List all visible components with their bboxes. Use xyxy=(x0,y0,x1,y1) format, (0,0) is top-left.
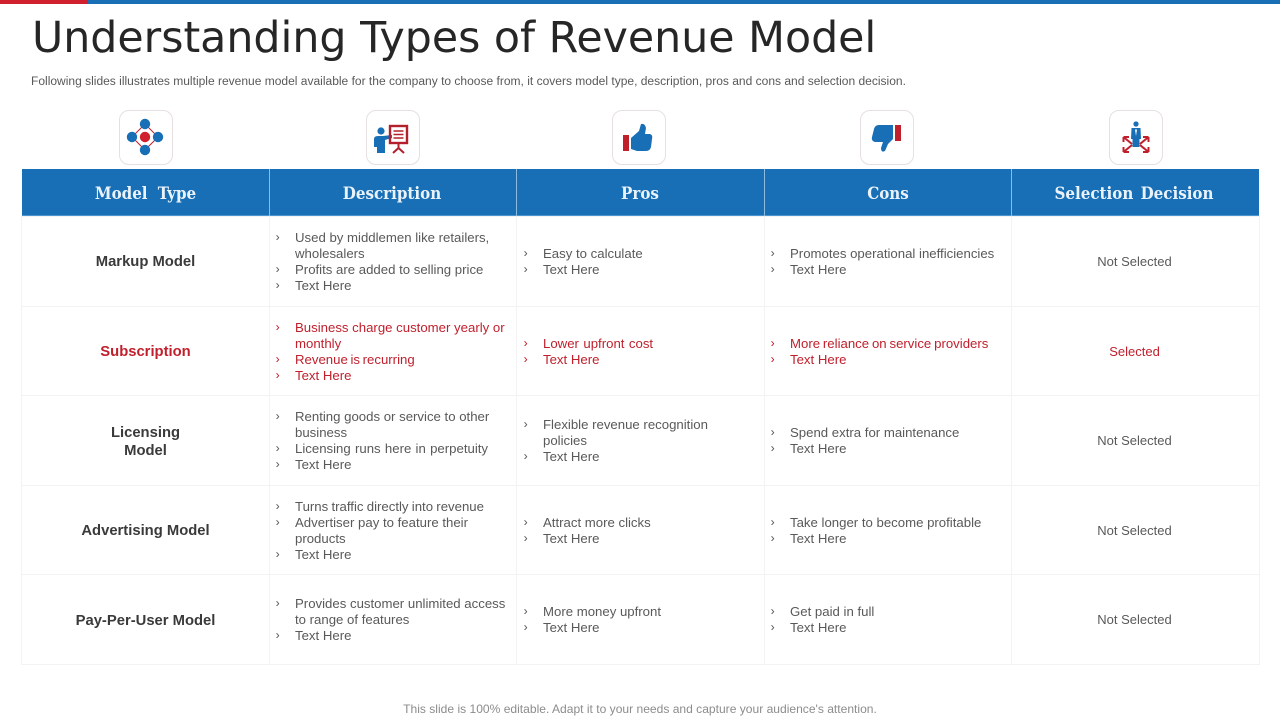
description bullets: › xyxy=(274,500,281,514)
description bullets: › xyxy=(274,629,281,643)
row: Advertising Model xyxy=(81,499,1172,562)
pros bullets xyxy=(522,417,708,464)
cons bullets: › xyxy=(769,337,776,351)
description bullets: Licensing runs here in perpetuity xyxy=(295,441,488,456)
footer note: This slide is 100% editable. Adapt it to your needs and capture your audience's attention. xyxy=(403,702,877,716)
model name xyxy=(111,425,180,459)
pros bullets: Flexible revenue recognition xyxy=(543,417,708,432)
description bullets: monthly xyxy=(295,336,341,351)
pros bullets: Easy to calculate xyxy=(543,246,643,261)
description bullets: Advertiser pay to feature their xyxy=(295,515,468,530)
row: Licensing Model xyxy=(111,409,1172,472)
cons bullets: › xyxy=(769,532,776,546)
pros bullets: › xyxy=(522,516,529,530)
cons bullets: Get paid in full xyxy=(790,604,874,619)
row: Markup Model xyxy=(96,230,1172,293)
pros bullets: › xyxy=(522,337,529,351)
pros bullets: › xyxy=(522,605,529,619)
description bullets: › xyxy=(274,231,281,245)
cons bullets: › xyxy=(769,621,776,635)
description bullets: › xyxy=(274,458,281,472)
description bullets: › xyxy=(274,597,281,611)
description bullets: wholesalers xyxy=(295,246,365,261)
cons bullets: Spend extra for maintenance xyxy=(790,425,959,440)
cons bullets: Text Here xyxy=(790,262,846,277)
pros bullets: Text Here xyxy=(543,449,599,464)
decision: Selected xyxy=(1109,344,1160,359)
pros bullets xyxy=(522,515,651,546)
top accent bar xyxy=(0,0,1280,4)
decision: Not Selected xyxy=(1097,433,1172,448)
description bullets xyxy=(274,230,489,293)
cons bullets: › xyxy=(769,426,776,440)
pros bullets: Text Here xyxy=(543,531,599,546)
description bullets: Text Here xyxy=(295,368,351,383)
description bullets: › xyxy=(274,410,281,424)
model name: Subscription xyxy=(100,344,191,360)
icon: network xyxy=(119,110,173,165)
description bullets: Used by middlemen like retailers, xyxy=(295,230,489,245)
cons bullets xyxy=(769,246,994,277)
cons bullets: › xyxy=(769,442,776,456)
description bullets: Text Here xyxy=(295,628,351,643)
cons bullets: Text Here xyxy=(790,352,846,367)
pros bullets: Text Here xyxy=(543,262,599,277)
description bullets xyxy=(274,409,490,472)
model name: Markup Model xyxy=(96,254,195,270)
cons bullets: Text Here xyxy=(790,531,846,546)
title: Understanding Types of Revenue Model xyxy=(32,13,876,63)
subtitle: Following slides illustrates multiple revenue model available for the company to choose from, it covers model type, description, pros and cons and selection decision. xyxy=(31,74,906,88)
pros bullets: Lower upfront cost xyxy=(543,336,653,351)
description bullets: › xyxy=(274,353,281,367)
table header xyxy=(22,169,1259,216)
pros bullets xyxy=(522,604,661,635)
model name: Model xyxy=(124,443,167,459)
description bullets: Text Here xyxy=(295,547,351,562)
description bullets: Renting goods or service to other xyxy=(295,409,489,424)
row: Pay-Per-User Model xyxy=(76,596,1172,643)
cons bullets: › xyxy=(769,247,776,261)
header dividers xyxy=(269,169,1012,216)
cons bullets: Take longer to become profitable xyxy=(790,515,981,530)
description bullets: › xyxy=(274,548,281,562)
cons bullets: › xyxy=(769,263,776,277)
description bullets: Turns traffic directly into revenue xyxy=(295,499,484,514)
description bullets: products xyxy=(295,531,346,546)
cons bullets: Text Here xyxy=(790,441,846,456)
cons bullets xyxy=(769,515,981,546)
cons bullets: More reliance on service providers xyxy=(790,336,988,351)
description bullets: › xyxy=(274,369,281,383)
pros bullets: Text Here xyxy=(543,620,599,635)
header: Cons: Cons xyxy=(867,183,909,203)
description bullets: › xyxy=(274,442,281,456)
description bullets xyxy=(274,596,505,643)
description bullets: Text Here xyxy=(295,278,351,293)
pros bullets: › xyxy=(522,353,529,367)
icon: thumbs down xyxy=(860,110,914,165)
description bullets: Provides customer unlimited access xyxy=(295,596,505,611)
description bullets: › xyxy=(274,279,281,293)
header: Selection Decision: Selection Decision xyxy=(1055,183,1213,203)
cons bullets: Text Here xyxy=(790,620,846,635)
pros bullets: › xyxy=(522,263,529,277)
cons bullets: › xyxy=(769,353,776,367)
description bullets xyxy=(274,320,505,383)
description bullets: › xyxy=(274,321,281,335)
model name: Licensing xyxy=(111,425,180,441)
pros bullets: › xyxy=(522,247,529,261)
pros bullets: Attract more clicks xyxy=(543,515,651,530)
cons bullets xyxy=(769,425,959,456)
icon: presenter xyxy=(366,110,420,165)
pros bullets: › xyxy=(522,450,529,464)
description bullets: › xyxy=(274,263,281,277)
model name: Pay-Per-User Model xyxy=(76,613,215,629)
icon: decision person xyxy=(1109,110,1163,165)
pros bullets: › xyxy=(522,621,529,635)
cons bullets xyxy=(769,604,874,635)
header: Description: Description xyxy=(343,183,441,203)
pros bullets: › xyxy=(522,418,529,432)
description bullets: › xyxy=(274,516,281,530)
decision: Not Selected xyxy=(1097,523,1172,538)
header: Model Type: Model Type xyxy=(95,183,196,203)
cons bullets: › xyxy=(769,605,776,619)
cons bullets: Promotes operational inefficiencies xyxy=(790,246,994,261)
decision: Not Selected xyxy=(1097,612,1172,627)
description bullets: Profits are added to selling price xyxy=(295,262,483,277)
description bullets: business xyxy=(295,425,347,440)
pros bullets: › xyxy=(522,532,529,546)
decision: Not Selected xyxy=(1097,254,1172,269)
pros bullets: More money upfront xyxy=(543,604,661,619)
description bullets: to range of features xyxy=(295,612,409,627)
icon: thumbs up xyxy=(612,110,666,165)
description bullets: Revenue is recurring xyxy=(295,352,415,367)
pros bullets xyxy=(522,246,643,277)
row: Subscription (selected) xyxy=(100,320,1160,383)
description bullets xyxy=(274,499,484,562)
pros bullets: Text Here xyxy=(543,352,599,367)
pros bullets: policies xyxy=(543,433,587,448)
description bullets: Text Here xyxy=(295,457,351,472)
pros bullets xyxy=(522,336,653,367)
description bullets: Business charge customer yearly or xyxy=(295,320,505,335)
cons bullets: › xyxy=(769,516,776,530)
model name: Advertising Model xyxy=(81,523,210,539)
header: Pros: Pros xyxy=(621,183,659,203)
cons bullets xyxy=(769,336,988,367)
